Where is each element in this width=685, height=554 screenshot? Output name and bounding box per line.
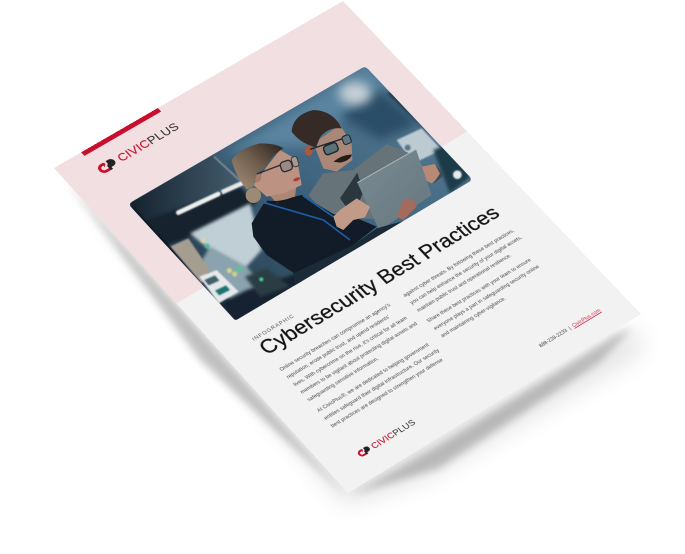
background [130, 67, 470, 323]
body text column 2 paragraph 1: you can help enhance the security of your digital assets, [409, 236, 524, 306]
bottom logo wordmark: CIVICPLUS [369, 418, 418, 451]
body text column 2 paragraph 2: everyone plays a part in safeguarding security online [433, 265, 541, 331]
page: flyer [54, 1, 641, 493]
photo: two colleagues with tablet [130, 67, 471, 320]
contact line: 888-228-2233 | CivicPlus.com [538, 308, 602, 349]
body text column 2 paragraph 1: maintain public trust and operational resilience. [416, 253, 513, 313]
logo icon [98, 158, 116, 174]
pink header band [54, 1, 467, 303]
body text column 1 paragraph 2: At CivicPlus®, we are dedicated to helping government [316, 343, 431, 414]
man [292, 110, 444, 220]
body text column 2 paragraph 1: against cyber threats. By following these best practices, [402, 229, 516, 298]
body text column 1 paragraph 2: entities safeguard their digital infrastructure. Our security [323, 348, 441, 421]
logo wordmark: CIVICPLUS [115, 121, 182, 164]
bottom logo icon [358, 446, 370, 457]
title: Cybersecurity Best Practices [255, 203, 505, 359]
body text column 2 paragraph 2: and maintaining cyber-vigilance. [440, 296, 508, 339]
body text column 1 paragraph 1: Online security breaches can compromise an agency's [279, 303, 392, 372]
body text column 1 paragraph 1: members to be vigilant about protecting digital assets and [300, 322, 419, 395]
eyebrow label: INFOGRAPHIC [251, 313, 296, 342]
body text column 2 paragraph 2: Share these best practices with your team to ensure [426, 258, 533, 324]
woman [232, 143, 427, 293]
top logo [98, 121, 182, 174]
red accent bar [81, 108, 161, 156]
body text column 1 paragraph 1: lives. With cybercrime on the rise, it's critical for all team [293, 316, 409, 388]
body text column 1 paragraph 2: best practices are designed to strengthen your defense [330, 358, 445, 429]
bottom logo [358, 418, 418, 457]
body text column 1 paragraph 1: reputation, erode public trust, and upend residents' [286, 315, 391, 380]
body text column 1 paragraph 1: safeguarding sensitive information. [307, 357, 380, 403]
body text column 1 paragraph 1 [279, 303, 419, 403]
tablet [357, 149, 432, 231]
